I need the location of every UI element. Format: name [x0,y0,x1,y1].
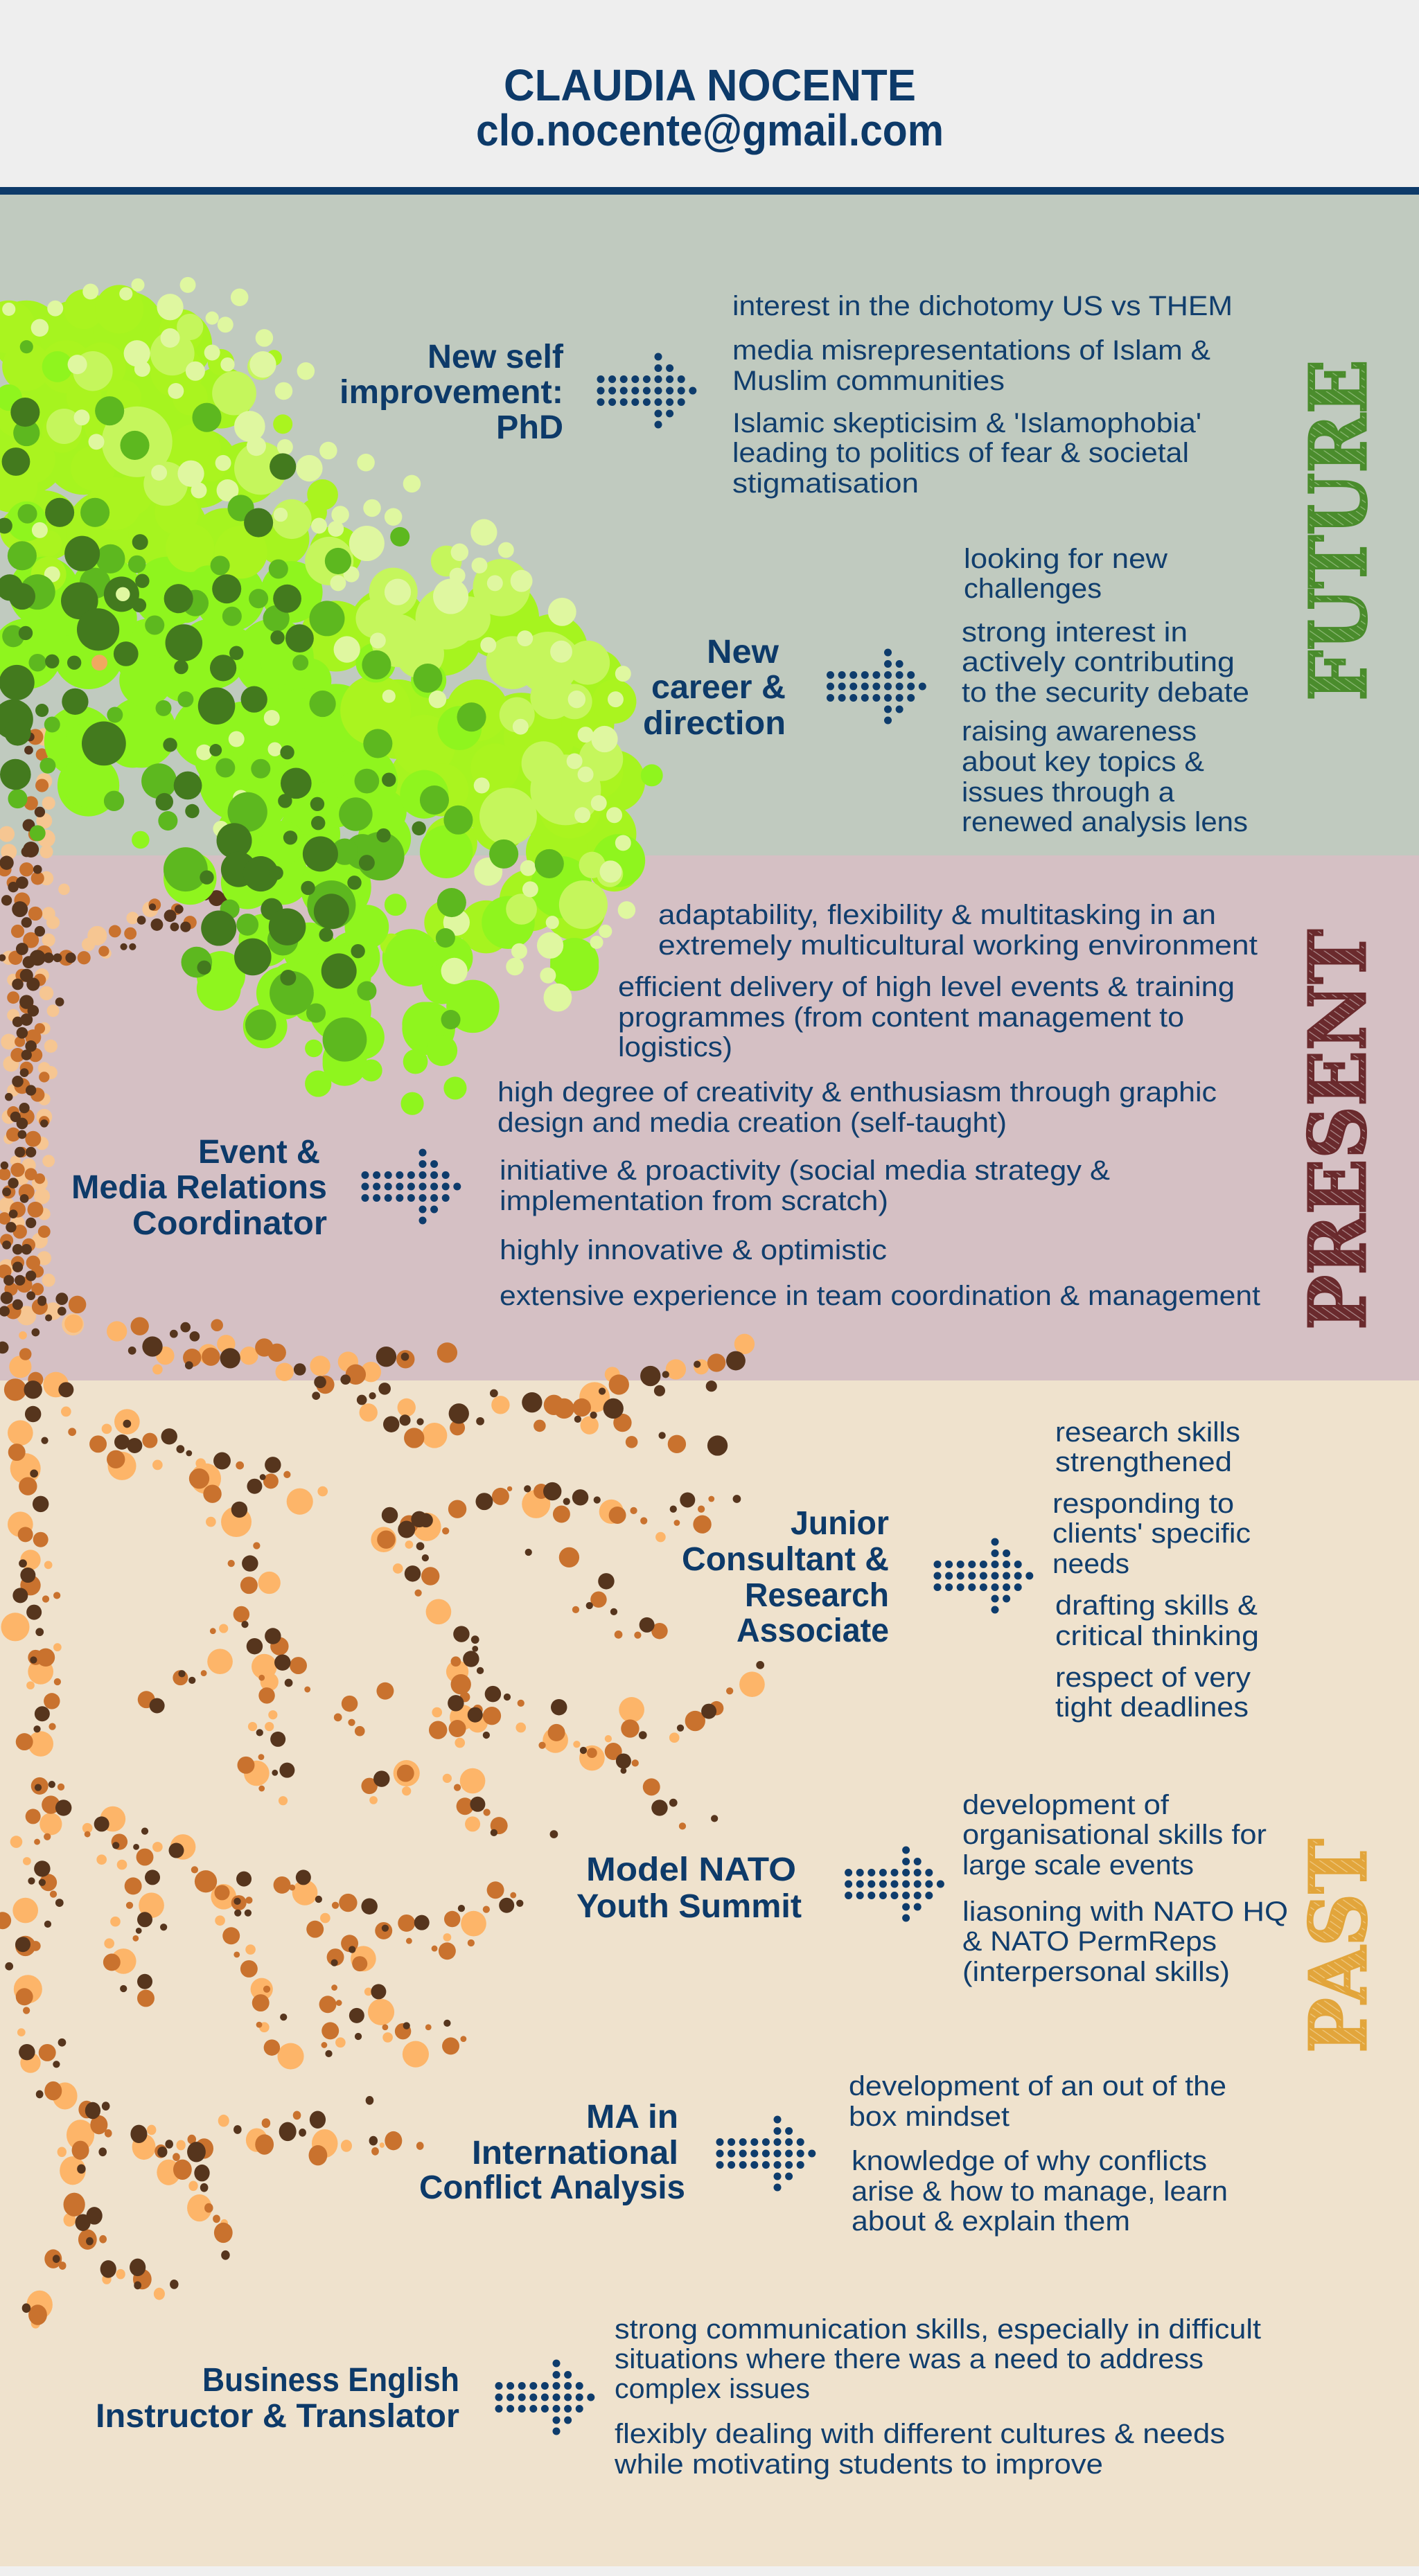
text block: present skills: adaptability, flexibility & multitasking in an [658,900,1216,930]
text block: career skills: issues through a [962,777,1175,808]
heading: PAST: PAST [1294,1839,1384,2053]
text block: PhD skills: Islamic skepticisim & 'Islamophobia' [732,408,1201,438]
heading: New career direction [643,634,786,742]
text block: present skills: highly innovative & optimistic [500,1235,887,1265]
text block: junior skills: research skills [1055,1417,1240,1448]
text block: business skills: flexibly dealing with different cultures & needs [615,2419,1225,2449]
text block: NATO skills: organisational skills for [962,1820,1267,1850]
text block: MA skills: development of an out of the [849,2071,1226,2102]
text block: business skills: strong communication skills, especially in difficult [615,2314,1261,2345]
text block: junior skills: clients' specific [1052,1518,1251,1549]
text block: present skills: extremely multicultural working environment [658,930,1258,961]
title [476,60,944,155]
text block: NATO skills: large scale events [962,1850,1194,1881]
text block: junior skills: critical thinking [1055,1621,1259,1651]
heading: Event and Media Relations Coordinator: Event & [198,1134,320,1171]
heading: MA in International Conflict Analysis: Conflict Analysis [419,2169,685,2206]
panel: past band [0,1380,1419,2566]
text block: present skills: extensive experience in team coordination & management [500,1281,1260,1311]
text block: junior skills: tight deadlines [1055,1692,1249,1723]
heading: Model NATO Youth Summit: Youth Summit [576,1888,802,1925]
text block: career skills: looking for new [964,544,1167,574]
text block: business skills: situations where there was a need to address [615,2344,1204,2374]
text block: PhD skills: interest in the dichotomy US vs THEM [732,291,1233,321]
footer strip [0,2566,1419,2576]
text block: junior skills: strengthened [1055,1447,1232,1477]
text block: business skills [614,2314,1261,2480]
heading: MA in International Conflict Analysis: MA in [586,2099,678,2135]
panel: future band [0,195,1419,855]
heading: Business English Instructor and Translator: Business English [202,2362,459,2399]
text block: junior skills: respect of very [1055,1662,1251,1693]
text block: MA skills [849,2071,1228,2237]
icon: dotted arrow MA [716,2115,816,2192]
text block: MA skills: arise & how to manage, learn [852,2176,1228,2207]
text block: career skills: actively contributing [962,647,1235,677]
text block: NATO skills: (interpersonal skills) [962,1957,1230,1987]
chart: tree foliage [0,277,663,1115]
text block: career skills [962,544,1249,837]
text block: career skills: raising awareness [962,716,1197,747]
text block: NATO skills [962,1790,1288,1987]
panel: present band [0,855,1419,1380]
text block: PhD skills: media misrepresentations of Islam & [732,335,1210,366]
text block: career skills: challenges [964,574,1102,604]
text block: MA skills: knowledge of why conflicts [852,2146,1207,2176]
heading: Junior Consultant and Research Associate: Research [745,1577,889,1614]
text block: junior skills: drafting skills & [1055,1590,1258,1621]
chart: lower roots [22,2081,424,2329]
text block: PhD skills: Muslim communities [732,366,1005,396]
text block: present skills: programmes (from content management to [618,1002,1184,1033]
icon: dotted arrow PhD [597,353,696,428]
heading: New self improvement PhD: PhD [496,409,563,446]
heading: Event and Media Relations Coordinator: Coordinator [132,1205,327,1242]
heading: FUTURE: FUTURE [1294,359,1384,701]
text block: PhD skills: stigmatisation [732,468,919,499]
heading: Model NATO Youth Summit [576,1851,802,1925]
heading: Business English Instructor and Translator [96,2362,459,2435]
text block: present skills: implementation from scratch) [500,1186,888,1216]
text block: junior skills: responding to [1052,1489,1234,1519]
heading: New career direction: career & [651,669,786,706]
text block: present skills [497,900,1260,1311]
heading: MA in International Conflict Analysis [419,2099,685,2206]
text block: present skills: high degree of creativity & enthusiasm through graphic [497,1077,1217,1108]
header rule [0,187,1419,195]
heading: Model NATO Youth Summit: Model NATO [586,1851,796,1888]
heading: New self improvement PhD: New self [428,339,564,375]
heading: Event and Media Relations Coordinator: Media Relations [71,1169,327,1206]
text block: career skills: to the security debate [962,677,1249,708]
text block: present skills: logistics) [618,1032,732,1063]
icon: dotted arrow NATO [845,1847,944,1921]
text block: present skills: design and media creation (self-taught) [497,1108,1007,1138]
heading: New career direction: direction [643,705,786,742]
heading: New self improvement PhD: improvement: [340,374,563,411]
text block: NATO skills: development of [962,1790,1170,1820]
text block: career skills: strong interest in [962,617,1188,648]
chart: tree trunk [0,728,246,1335]
text block: NATO skills: liasoning with NATO HQ [962,1897,1288,1927]
icon: dotted arrow career [827,648,926,725]
heading: MA in International Conflict Analysis: International [472,2135,678,2171]
chart: roots [0,1315,765,2073]
icon: dotted arrow junior [934,1538,1033,1614]
icon: dotted arrow event [362,1148,461,1225]
text block: junior skills [1052,1417,1259,1723]
text block: present skills: efficient delivery of high level events & training [618,972,1235,1002]
panel: header background [0,0,1419,187]
heading: PRESENT: PRESENT [1293,930,1384,1330]
text block: junior skills: needs [1052,1549,1129,1579]
title: clo.nocente@gmail.com [476,105,944,155]
title: CLAUDIA NOCENTE [504,60,916,110]
text block: career skills: about key topics & [962,747,1204,777]
heading: Event and Media Relations Coordinator [71,1134,327,1242]
heading: Junior Consultant and Research Associate: Junior [791,1505,889,1542]
heading: New career direction: New [707,634,779,670]
icon: dotted arrow business [495,2359,594,2435]
text block: PhD skills [732,291,1233,499]
text block: NATO skills: & NATO PermReps [962,1926,1217,1957]
text block: MA skills: box mindset [849,2102,1010,2132]
heading: Junior Consultant and Research Associate: Associate [737,1613,889,1649]
text block: present skills: initiative & proactivity (social media strategy & [500,1155,1110,1186]
heading: Junior Consultant and Research Associate [682,1505,889,1649]
text block: business skills: while motivating students to improve [614,2449,1103,2480]
text block: business skills: complex issues [615,2374,810,2404]
text block: MA skills: about & explain them [852,2206,1130,2237]
heading: Junior Consultant and Research Associate: Consultant & [682,1541,889,1578]
text block: PhD skills: leading to politics of fear & societal [732,438,1189,468]
heading: New self improvement PhD [340,339,564,446]
text block: career skills: renewed analysis lens [962,807,1248,837]
heading: Business English Instructor and Translator: Instructor & Translator [96,2398,459,2435]
